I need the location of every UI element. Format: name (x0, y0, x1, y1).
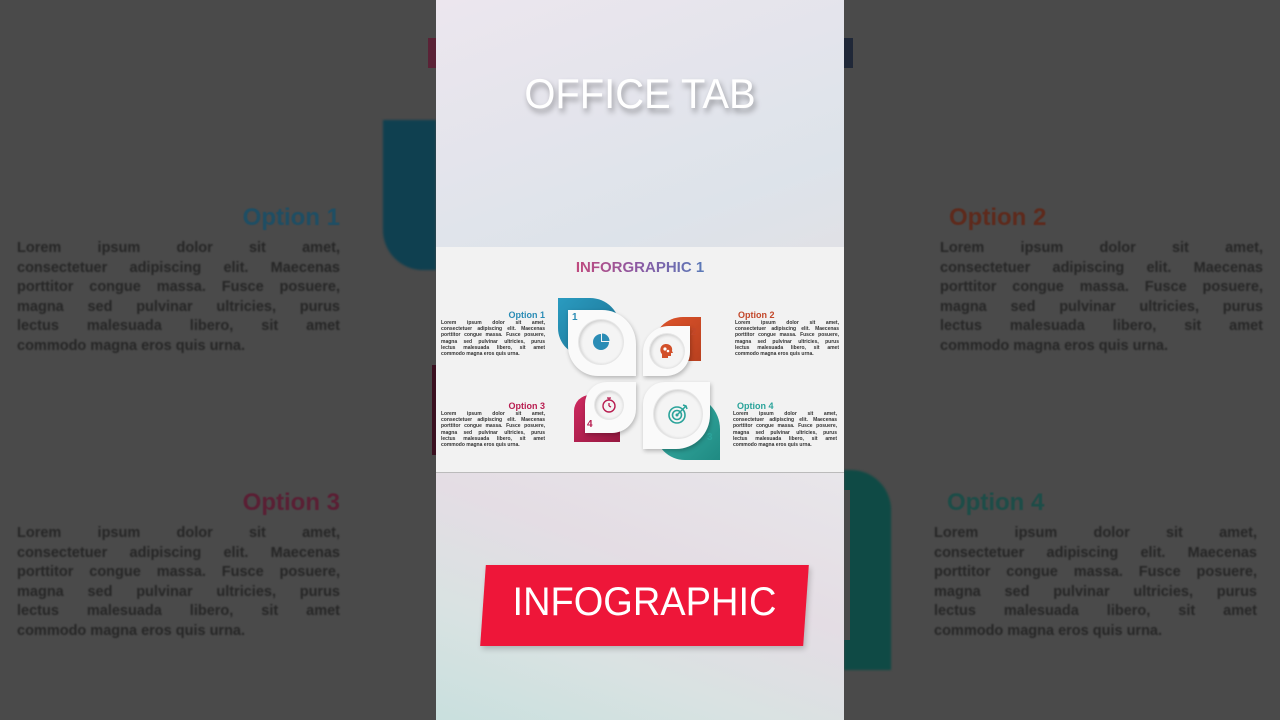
icon: head with gears (660, 344, 673, 358)
text block: option 1 left: Lorem ipsum dolor sit amet, (17, 240, 340, 256)
icon: stopwatch (602, 397, 616, 413)
text: Option 2: Option 2 (738, 310, 774, 320)
blurred magenta bar top left (428, 38, 436, 68)
text block: option 4 right: consectetuer adipiscing elit. Maecenas (934, 544, 1257, 560)
text: Option 4: porttitor congue massa. Fusce posuere, (733, 423, 837, 429)
text block: option 3 left: lectus malesuada libero, sit amet (17, 603, 340, 619)
text block: option 1 left: consectetuer adipiscing elit. Maecenas (17, 260, 340, 276)
text block: option 1 left: lectus malesuada libero, sit amet (17, 318, 340, 334)
text block: option 4 right: magna sed pulvinar ultricies, purus (934, 584, 1257, 600)
text block: option 3 left: porttitor congue massa. Fusce posuere, (17, 564, 340, 580)
text block: option 2 right: Lorem ipsum dolor sit amet, (940, 240, 1263, 256)
text block: option 3 left: consectetuer adipiscing elit. Maecenas (17, 544, 340, 560)
text: Option 4: consectetuer adipiscing elit. Maecenas (733, 417, 837, 423)
text block: option 1 left: magna sed pulvinar ultricies, purus (17, 298, 340, 314)
heading: Option 1 left: Option 1 (243, 204, 340, 231)
text block: option 2 right: consectetuer adipiscing elit. Maecenas (940, 260, 1263, 276)
text: Option 1: consectetuer adipiscing elit. Maecenas (441, 326, 545, 332)
text: Option 3: Option 3 (508, 401, 545, 411)
text: Option 2: porttitor congue massa. Fusce posuere, (735, 332, 839, 338)
text block: option 4 right: commodo magna eros quis urna. (934, 622, 1162, 638)
text: Option 4: magna sed pulvinar ultricies, purus (733, 430, 837, 436)
panel: center column: INFOGRAPHIC (513, 580, 776, 624)
icon: pie chart (593, 334, 610, 350)
text: Option 4: commodo magna eros quis urna. (733, 442, 812, 448)
text: Option 3: porttitor congue massa. Fusce posuere, (441, 423, 545, 429)
text: Option 3: commodo magna eros quis urna. (441, 442, 520, 448)
text block: option 1 left: porttitor congue massa. Fusce posuere, (17, 279, 340, 295)
text: Option 1: Lorem ipsum dolor sit amet, (441, 320, 545, 326)
text block: option 4 right (934, 525, 1257, 638)
petal 2 orange: 2 (691, 327, 697, 338)
text: Option 3: Lorem ipsum dolor sit amet, (441, 411, 545, 417)
text block: option 4 right: Lorem ipsum dolor sit amet, (934, 525, 1257, 541)
icon: target (668, 404, 688, 424)
text: Option 4: Lorem ipsum dolor sit amet, (733, 411, 837, 417)
text: Option 1: commodo magna eros quis urna. (441, 351, 520, 357)
heading: Option 3 left: Option 3 (243, 489, 340, 516)
petal 3 magenta (4) (574, 382, 640, 442)
petal 2 orange (642, 317, 701, 380)
petal 1 teal: 1 (572, 312, 578, 323)
panel: right blurred background (844, 38, 1263, 671)
panel: center column (436, 0, 844, 720)
text: Option 4 (733, 401, 837, 448)
text: Option 4: Option 4 (737, 401, 774, 411)
petal 3 magenta (4): 4 (587, 419, 593, 430)
text block: option 3 left: magna sed pulvinar ultricies, purus (17, 584, 340, 600)
text: Option 3: lectus malesuada libero, sit amet (441, 436, 545, 442)
heading: Option 4 right: Option 4 (947, 489, 1044, 516)
text block: option 1 left: commodo magna eros quis urna. (17, 338, 245, 354)
text: Option 2: lectus malesuada libero, sit amet (735, 345, 839, 351)
text: Option 2: consectetuer adipiscing elit. Maecenas (735, 326, 839, 332)
text: Option 1: lectus malesuada libero, sit amet (441, 345, 545, 351)
panel: left blurred background (17, 38, 436, 638)
petal 4 teal (3): 3 (707, 432, 713, 443)
text block: option 4 right: lectus malesuada libero, sit amet (934, 603, 1257, 619)
text block: option 2 right (940, 240, 1263, 354)
blurred magenta shape bottom left (432, 365, 436, 455)
text block: option 2 right: porttitor congue massa. Fusce posuere, (940, 279, 1263, 295)
text block: option 3 left: commodo magna eros quis urna. (17, 622, 245, 638)
text: Option 2: Lorem ipsum dolor sit amet, (735, 320, 839, 326)
title: OFFICE TAB: OFFICE TAB (524, 70, 756, 117)
text: Option 4: lectus malesuada libero, sit amet (733, 436, 837, 442)
text: Option 1: porttitor congue massa. Fusce posuere, (441, 332, 545, 338)
banner: INFOGRAPHIC (480, 565, 809, 646)
petal 1 teal (558, 298, 640, 380)
text: Option 2: commodo magna eros quis urna. (735, 351, 814, 357)
blurred teal shape right (844, 470, 891, 670)
text block: option 2 right: lectus malesuada libero, sit amet (940, 318, 1263, 334)
text block: option 1 left (17, 240, 340, 354)
text: Option 3: magna sed pulvinar ultricies, purus (441, 430, 545, 436)
text block: option 2 right: magna sed pulvinar ultricies, purus (940, 298, 1263, 314)
text: Option 2: magna sed pulvinar ultricies, purus (735, 339, 839, 345)
petal 4 teal (3) (642, 382, 720, 460)
bottom gradient area (436, 473, 844, 720)
text: Option 1 (441, 310, 545, 357)
blurred bar top right (844, 38, 853, 68)
text block: option 3 left: Lorem ipsum dolor sit amet, (17, 525, 340, 541)
heading: Option 2 right: Option 2 (949, 204, 1046, 231)
text block: option 2 right: commodo magna eros quis urna. (940, 338, 1168, 354)
text block: option 3 left (17, 525, 340, 638)
text: Option 1: magna sed pulvinar ultricies, purus (441, 339, 545, 345)
text: Option 3: consectetuer adipiscing elit. Maecenas (441, 417, 545, 423)
text: Option 1: Option 1 (508, 310, 545, 320)
text: Option 2 (735, 310, 839, 357)
panel: infographic slide (436, 247, 844, 473)
text: Option 3 (441, 401, 545, 448)
heading: INFORGRAPHIC 1: INFORGRAPHIC 1 (576, 259, 704, 276)
blurred teal shape left (383, 120, 436, 270)
text block: option 4 right: porttitor congue massa. Fusce posuere, (934, 564, 1257, 580)
